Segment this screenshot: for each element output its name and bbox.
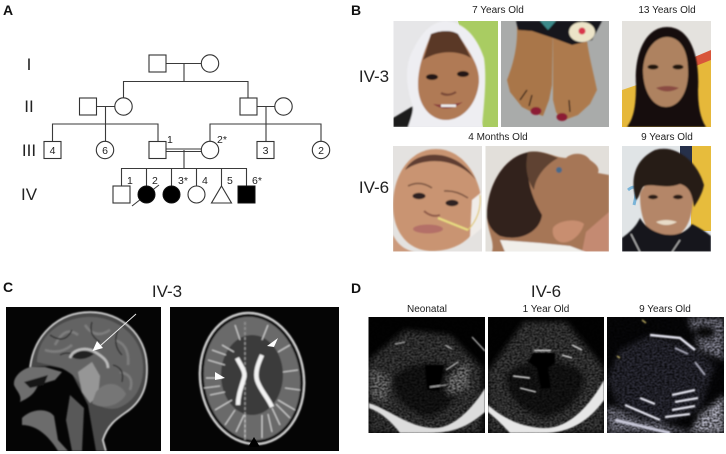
photo: IV-3 face at 7 years: [393, 21, 499, 127]
generation III members: 1: [167, 134, 173, 146]
generation III members: [44, 134, 330, 159]
generation labels: IV: [21, 185, 38, 204]
caption: 13 years old: 13 Years Old: [638, 5, 696, 16]
caption: 4 months old: 4 Months Old: [468, 132, 528, 143]
heading IV-3: IV-3: [152, 282, 182, 301]
caption: 9 years old echo: 9 Years Old: [639, 304, 691, 315]
generation IV members: 4: [202, 175, 208, 187]
caption: 7 years old: 7 Years Old: [472, 5, 524, 16]
generation III members: 3: [263, 145, 269, 157]
row label IV-6: IV-6: [359, 178, 389, 197]
photo: IV-6 infant face: [393, 146, 482, 252]
generation I couple: [149, 55, 219, 72]
echocardiogram: 9 years old: [607, 317, 724, 433]
photo: IV-6 infant profile: [486, 146, 610, 252]
photo: IV-3 feet: [501, 21, 609, 127]
generation IV members: 5: [227, 175, 233, 187]
panel label D: D: [351, 280, 361, 296]
caption: 9 years old: 9 Years Old: [641, 132, 693, 143]
generation III members: 2: [318, 145, 324, 157]
generation IV members: [113, 175, 262, 206]
generation II right couple: [240, 98, 292, 115]
row label IV-3: IV-3: [359, 67, 389, 86]
MRI: axial view: [170, 305, 339, 452]
echocardiogram: neonatal: [368, 317, 486, 433]
generation IV members: 2: [152, 175, 158, 187]
generation III members: 2*: [217, 134, 227, 146]
generation IV members: 6*: [252, 175, 262, 187]
generation II left couple: [80, 98, 132, 115]
echocardiogram: 1 year old: [488, 317, 604, 433]
heading IV-6: IV-6: [531, 282, 561, 301]
generation III members: 6: [102, 145, 108, 157]
photo: IV-3 face at 13 years: [622, 21, 711, 127]
generation labels: [21, 55, 38, 204]
generation labels: I: [27, 55, 31, 74]
generation IV members: 1: [127, 175, 133, 187]
panel: pedigree: [21, 55, 330, 206]
pedigree connecting lines: [52, 64, 321, 186]
MRI: sagittal view: [6, 307, 161, 451]
panel label B: B: [351, 2, 361, 18]
panel label C: C: [3, 279, 13, 295]
generation IV members: 3*: [178, 175, 188, 187]
generation labels: III: [22, 141, 36, 160]
panel label A: A: [3, 2, 13, 18]
caption: neonatal: Neonatal: [407, 304, 447, 315]
generation III members: 4: [50, 145, 56, 157]
caption: 1 year old: 1 Year Old: [523, 304, 569, 315]
generation labels: II: [24, 97, 34, 116]
photo: IV-6 boy at 9 years: [622, 146, 711, 252]
